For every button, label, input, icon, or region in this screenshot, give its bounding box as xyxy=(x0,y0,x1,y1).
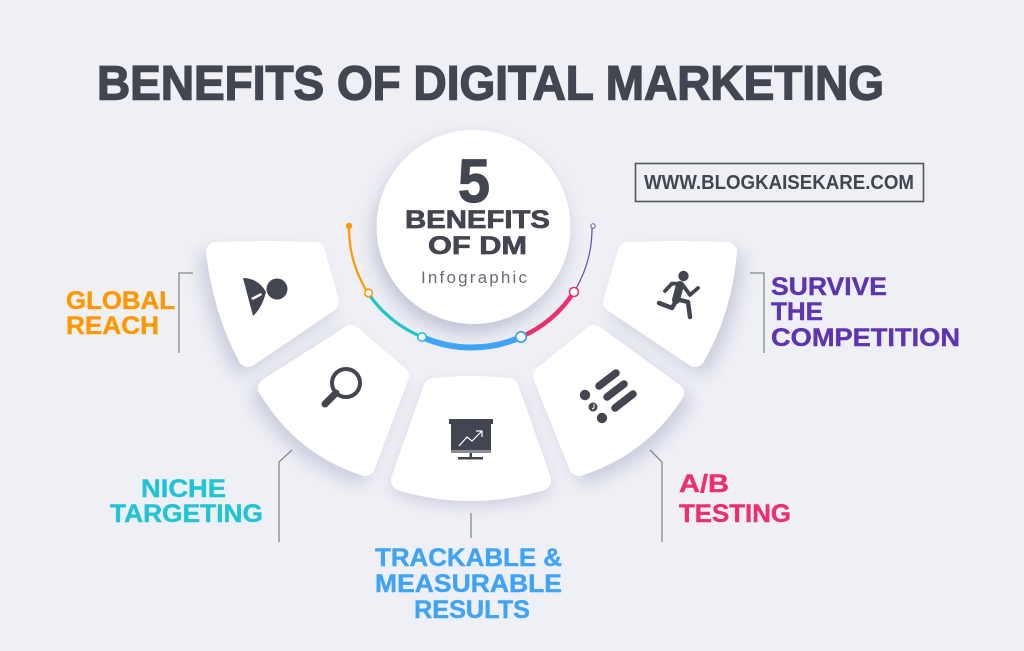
website url box: WWW.BLOGKAISEKARE.COM xyxy=(644,172,914,194)
icon: presentation board with chart xyxy=(449,419,493,460)
panel: niche targeting card xyxy=(268,335,399,466)
panel: survive the competition card xyxy=(613,251,727,357)
icon: checklist with clock xyxy=(580,373,633,423)
label: niche targeting: TARGETING xyxy=(110,500,263,528)
label: global reach: GLOBAL xyxy=(66,287,175,315)
number 5: 5 xyxy=(458,147,490,215)
leader line: niche targeting xyxy=(279,450,292,542)
leader line: survive the competition xyxy=(750,273,764,353)
panel: trackable and measurable results card xyxy=(402,387,540,490)
website url box xyxy=(636,164,924,202)
label: a/b testing: TESTING xyxy=(679,500,791,528)
label: niche targeting xyxy=(110,475,263,528)
icon: magnifying glass xyxy=(325,369,360,404)
label: survive the competition: COMPETITION xyxy=(771,324,960,352)
leader line: global reach xyxy=(179,273,193,353)
label: niche targeting: NICHE xyxy=(141,475,226,503)
label: global reach xyxy=(66,287,175,340)
label: trackable and measurable results: MEASURABLE xyxy=(375,570,562,598)
title: BENEFITS OF DIGITAL MARKETING xyxy=(97,58,884,110)
label: a/b testing: A/B xyxy=(679,470,729,498)
subheading: Infographic xyxy=(421,268,528,287)
label: a/b testing xyxy=(679,470,791,528)
panel: a/b testing card xyxy=(543,335,674,466)
heading: benefits: BENEFITS xyxy=(405,206,550,234)
label: trackable and measurable results: RESULTS xyxy=(414,596,530,624)
label: survive the competition xyxy=(771,273,960,352)
label: trackable and measurable results: TRACKABLE & xyxy=(375,544,562,572)
leader line: trackable results xyxy=(470,513,472,538)
center circle with heading xyxy=(376,130,570,324)
label: global reach: REACH xyxy=(66,312,159,340)
label: survive the competition: THE xyxy=(771,298,823,326)
heading: of dm: OF DM xyxy=(428,232,527,260)
leader line: a/b testing xyxy=(650,450,662,542)
segmented arc timeline xyxy=(346,223,595,347)
label: survive the competition: SURVIVE xyxy=(771,273,887,301)
label: trackable and measurable results xyxy=(375,544,562,624)
icon: global reach xyxy=(243,278,288,316)
icon: running person xyxy=(659,271,698,317)
panel: global reach card xyxy=(216,251,329,357)
